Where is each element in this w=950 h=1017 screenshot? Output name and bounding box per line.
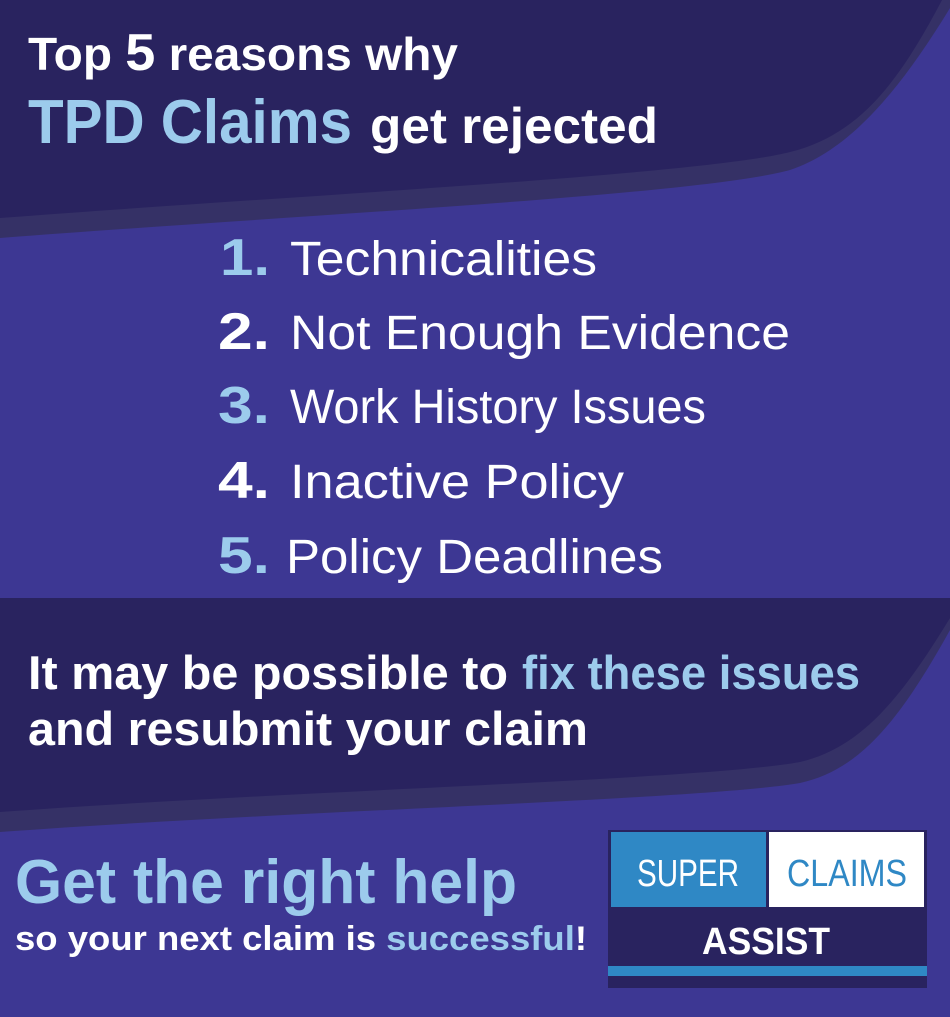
list of reasons: Policy Deadlines [286, 531, 663, 584]
list of reasons: 1. [220, 229, 270, 287]
title: Top 5 reasons why [28, 24, 458, 82]
middle banner shape [0, 598, 950, 832]
title [28, 24, 658, 157]
logo: Super Claims Assist [608, 830, 927, 988]
call to action: so your next claim is successful ! [15, 920, 587, 958]
title: TPD Claims [28, 88, 352, 157]
list of reasons: Technicalities [290, 233, 597, 286]
callout text: It may be possible to [28, 646, 508, 699]
title: get rejected [370, 98, 658, 154]
list of reasons: 4. [218, 452, 270, 510]
callout text: fix these issues [522, 646, 860, 699]
logo: Super Claims Assist: CLAIMS [787, 853, 907, 895]
top banner shape [0, 0, 950, 238]
logo: Super Claims Assist: SUPER [637, 853, 739, 895]
call to action [15, 848, 587, 958]
callout text [28, 646, 860, 755]
list of reasons: 3. [218, 377, 270, 435]
list of reasons: 5. [218, 527, 270, 585]
call to action: Get the right help [15, 848, 517, 917]
list of reasons: Work History Issues [290, 381, 706, 434]
list of reasons: 2. [218, 303, 270, 361]
callout text: and resubmit your claim [28, 702, 588, 755]
list of reasons [218, 229, 790, 585]
list of reasons: Not Enough Evidence [290, 307, 790, 360]
list of reasons: Inactive Policy [290, 456, 624, 509]
logo: Super Claims Assist: ASSIST [702, 921, 830, 963]
